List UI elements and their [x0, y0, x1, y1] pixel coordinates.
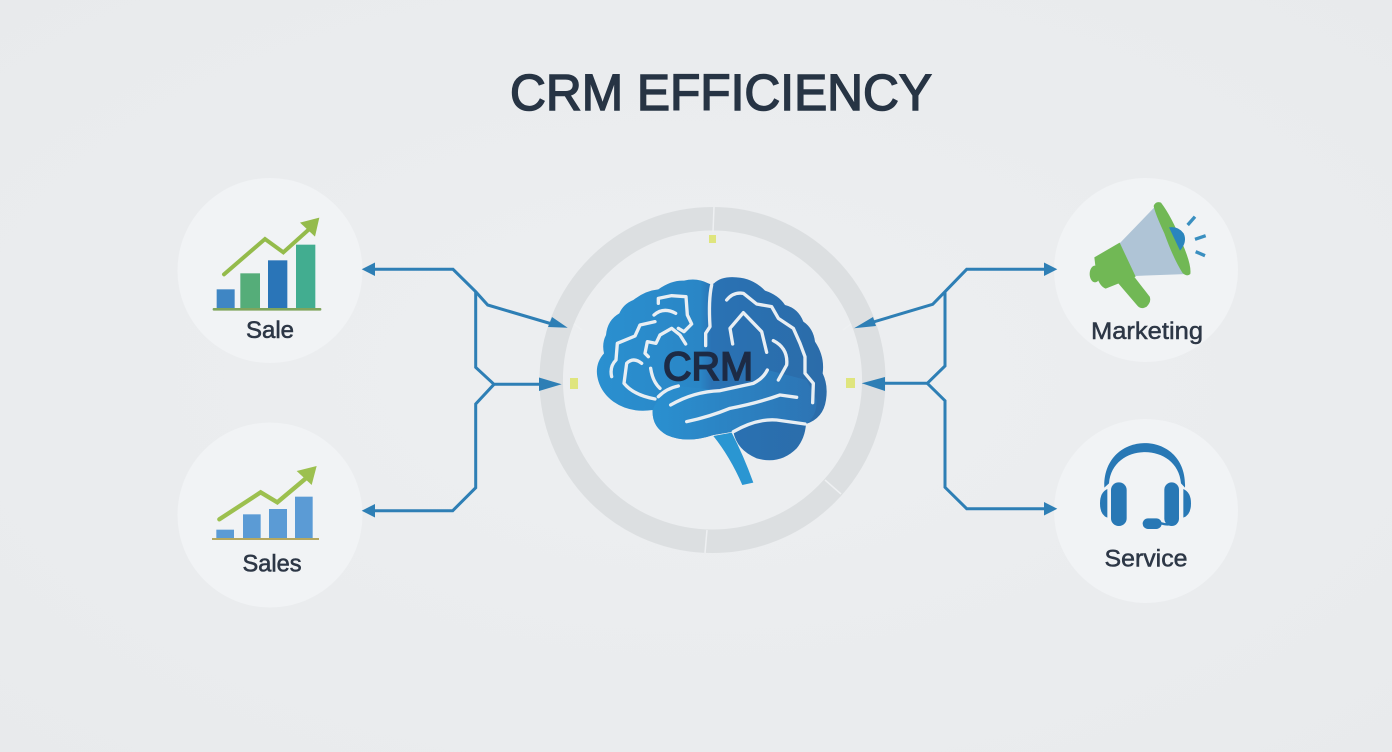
arrows: right connectors: [854, 262, 1057, 516]
label: CRM: CRM: [663, 345, 753, 389]
panel: Sales: [178, 422, 362, 608]
icon: sale bar chart with arrow: [213, 218, 321, 311]
icon: CRM brain: [597, 277, 827, 485]
panel: Marketing: [1054, 178, 1238, 362]
icon: megaphone: [1090, 202, 1206, 308]
panel: Service: [1054, 419, 1238, 603]
icon: headset: [1100, 443, 1191, 529]
arrows: left connectors: [362, 262, 568, 518]
label: Sales: Sales: [242, 550, 302, 578]
label: Marketing: Marketing: [1091, 318, 1203, 345]
label: Sale: Sale: [246, 317, 294, 344]
label: Service: Service: [1104, 546, 1188, 572]
icon: sales bar chart with arrow: [212, 466, 319, 540]
title: CRM EFFICIENCY: [510, 64, 932, 121]
panel: Sale: [178, 178, 362, 363]
central ring: [551, 207, 874, 553]
